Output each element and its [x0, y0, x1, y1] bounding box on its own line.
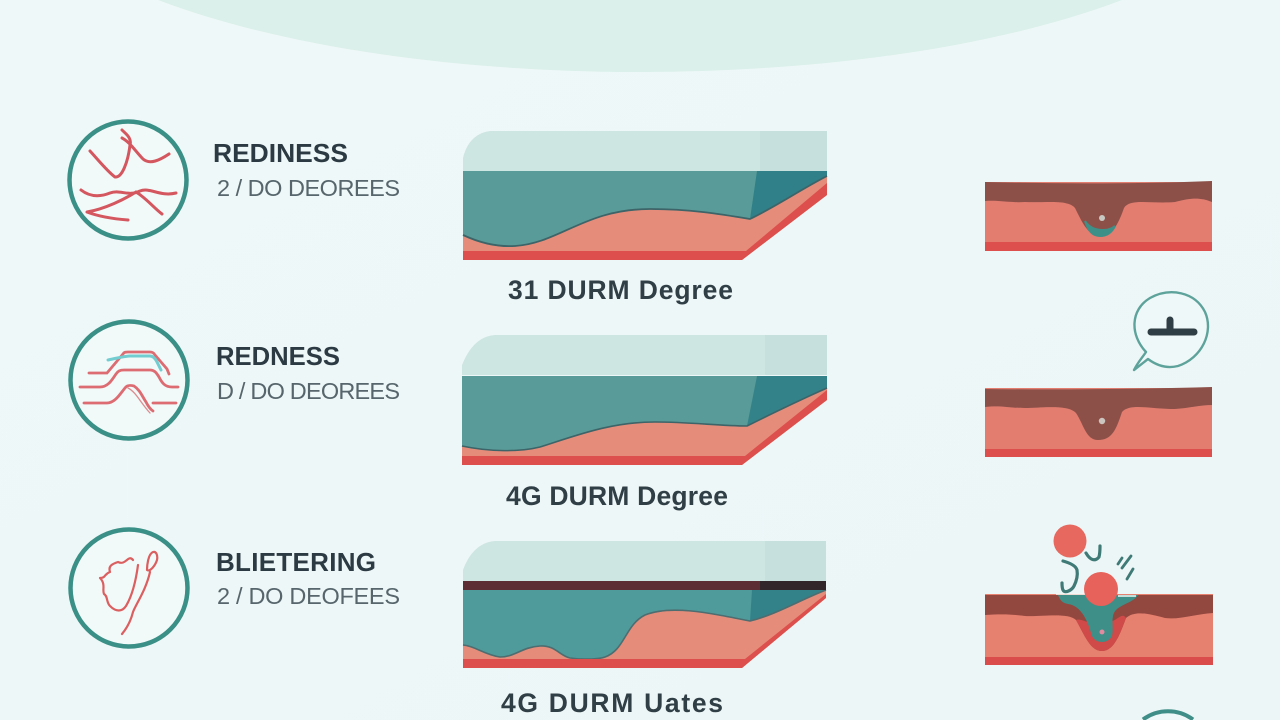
icon: redness squiggles — [70, 122, 186, 238]
top header arc — [158, 0, 1122, 72]
panel: skin cross-section first degree — [985, 181, 1212, 251]
subheading: first row: 2 / DO DEOREES — [217, 175, 400, 201]
panel: skin cross-section second degree — [985, 387, 1212, 457]
caption: second diagram: 4G DURM Degree — [506, 481, 728, 511]
icon: blister outline — [70, 530, 188, 646]
panel: skin diagram first degree — [463, 131, 827, 260]
subheading: third row: 2 / DO DEOFEES — [217, 583, 400, 609]
panel: skin diagram second degree — [462, 335, 827, 465]
heading: REDINESS: REDINESS — [213, 138, 348, 168]
caption: first diagram: 31 DURM Degree — [508, 275, 733, 305]
panel: skin cross-section third degree with blister — [985, 594, 1213, 665]
panel: skin diagram third degree — [463, 541, 826, 668]
subheading: second row: D / DO DEOREES — [217, 378, 400, 404]
icon: speech bubble — [1134, 292, 1208, 370]
caption: third diagram: 4G DURM Uates — [501, 688, 723, 718]
heading: BLIETERING: BLIETERING — [216, 547, 376, 577]
icon: redness layered lines — [70, 322, 188, 438]
heading: REDNESS: REDNESS — [216, 341, 340, 371]
icon: cropped circle at bottom edge — [1143, 711, 1193, 720]
icon: rising blister bubbles — [1054, 524, 1133, 606]
